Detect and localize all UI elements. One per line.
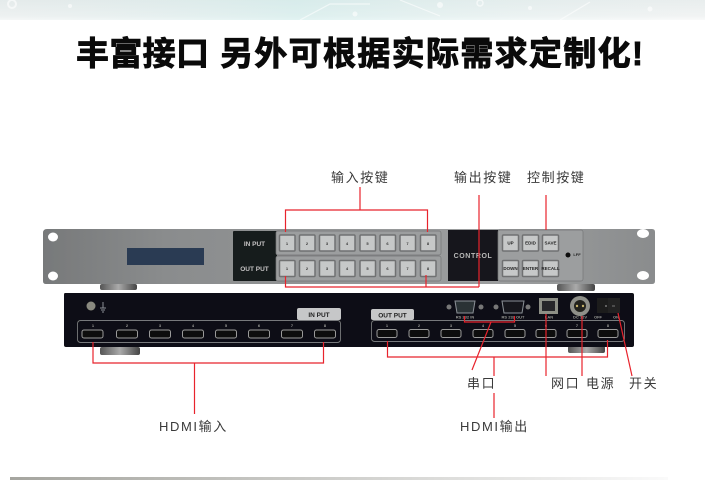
input keys: 4 bbox=[346, 241, 349, 246]
HDMI output group bbox=[371, 309, 624, 342]
input/output black block: OUT PUT bbox=[240, 266, 269, 273]
control keys: RECALL bbox=[541, 266, 560, 271]
callout: output keys bracket bbox=[286, 195, 479, 287]
label: serial port: 串口 bbox=[467, 376, 496, 391]
HDMI input group: 5 bbox=[225, 324, 227, 328]
label: HDMI output: HDMI输出 bbox=[460, 419, 529, 434]
rear feet bbox=[100, 346, 605, 355]
control keys: UP bbox=[507, 240, 514, 246]
input keys: 8 bbox=[427, 241, 430, 246]
rocker switch: ON bbox=[613, 314, 619, 320]
HDMI input group: 2 bbox=[126, 324, 128, 328]
label: control keys: 控制按键 bbox=[527, 170, 585, 185]
label: output keys: 输出按键 bbox=[454, 170, 512, 185]
LCD display bbox=[127, 248, 204, 265]
HDMI output group: 3 bbox=[450, 324, 452, 328]
rear panel device bbox=[64, 293, 634, 355]
input/output black block bbox=[233, 231, 277, 281]
label: power: 电源 bbox=[586, 376, 615, 391]
HDMI input group: 4 bbox=[192, 324, 194, 328]
front panel device bbox=[43, 229, 655, 291]
input keys: 5 bbox=[366, 241, 369, 246]
input keys: 7 bbox=[406, 241, 409, 246]
HDMI output group: 7 bbox=[576, 324, 578, 328]
LAN port bbox=[539, 298, 558, 320]
RS232 OUT port bbox=[494, 301, 530, 320]
HDMI input group: 7 bbox=[291, 324, 293, 328]
output keys: 4 bbox=[346, 266, 349, 271]
control keys: ENTER bbox=[523, 266, 539, 271]
key tray bbox=[276, 231, 441, 281]
callout: input keys bracket bbox=[286, 187, 428, 232]
HDMI input group: 6 bbox=[258, 324, 260, 328]
output keys: 1 bbox=[286, 266, 289, 271]
callout: switch line bbox=[618, 313, 632, 376]
output keys: 3 bbox=[326, 266, 329, 271]
HDMI output group: 8 bbox=[607, 324, 609, 328]
title: 另外可根据实际需求定制化! bbox=[220, 35, 643, 72]
output keys: 6 bbox=[386, 266, 389, 271]
LAN port: LAN bbox=[545, 314, 553, 320]
chassis bbox=[43, 229, 655, 284]
label: HDMI input: HDMI输入 bbox=[159, 419, 228, 434]
callout: control keys line bbox=[545, 195, 547, 230]
label: switch: 开关 bbox=[629, 376, 658, 391]
RS232 IN port bbox=[446, 301, 484, 320]
HDMI output group: 6 bbox=[545, 324, 547, 328]
bottom gradient strip bbox=[10, 477, 668, 480]
input/output black block: IN PUT bbox=[244, 241, 265, 248]
control block bbox=[448, 230, 498, 281]
callout: HDMI input bracket bbox=[93, 342, 324, 414]
HDMI output group: 4 bbox=[482, 324, 484, 328]
control block: CONTROL bbox=[454, 253, 493, 260]
rocker switch: OFF bbox=[594, 314, 603, 320]
callout: HDMI output bracket bbox=[388, 340, 608, 418]
output keys: 2 bbox=[306, 266, 309, 271]
input keys: 1 bbox=[286, 241, 289, 246]
callout: power line bbox=[581, 316, 583, 376]
HDMI input group: 1 bbox=[92, 324, 94, 328]
control keys bbox=[498, 230, 583, 281]
control keys: DOWN bbox=[503, 266, 518, 271]
callout: LAN line bbox=[545, 314, 547, 376]
label: input keys: 输入按键 bbox=[331, 170, 389, 185]
HDMI output group: 5 bbox=[514, 324, 516, 328]
output keys bbox=[280, 260, 436, 276]
rear chassis bbox=[64, 293, 634, 347]
HDMI input group: 8 bbox=[324, 324, 326, 328]
top decorative circuit band bbox=[0, 0, 705, 20]
callout: serial port lines bbox=[464, 316, 514, 370]
DC power connector bbox=[570, 296, 590, 320]
title: 丰富接口 bbox=[76, 35, 209, 72]
control keys: EDID bbox=[525, 240, 537, 246]
input keys bbox=[280, 235, 436, 251]
RS232 OUT port: RS 232 OUT bbox=[502, 314, 525, 320]
control keys: LFF bbox=[573, 252, 581, 257]
output keys: 5 bbox=[366, 266, 369, 271]
output keys: 7 bbox=[406, 266, 409, 271]
feet bbox=[100, 284, 595, 291]
input keys: 2 bbox=[306, 241, 309, 246]
HDMI input group: 3 bbox=[159, 324, 161, 328]
HDMI input group: IN PUT bbox=[308, 312, 330, 319]
HDMI output group: OUT PUT bbox=[378, 312, 407, 320]
HDMI input group bbox=[78, 308, 341, 342]
HDMI output group: 2 bbox=[418, 324, 420, 328]
control keys: SAVE bbox=[545, 240, 556, 246]
ground screw bbox=[86, 302, 106, 312]
DC power connector: DC 12V bbox=[573, 314, 587, 320]
rack holes bbox=[48, 229, 649, 280]
input keys: 6 bbox=[386, 241, 389, 246]
input keys: 3 bbox=[326, 241, 329, 246]
rocker switch bbox=[594, 298, 620, 320]
RS232 IN port: RS 232 IN bbox=[456, 314, 474, 320]
HDMI output group: 1 bbox=[386, 324, 388, 328]
label: network port: 网口 bbox=[551, 376, 580, 391]
output keys: 8 bbox=[427, 266, 430, 271]
